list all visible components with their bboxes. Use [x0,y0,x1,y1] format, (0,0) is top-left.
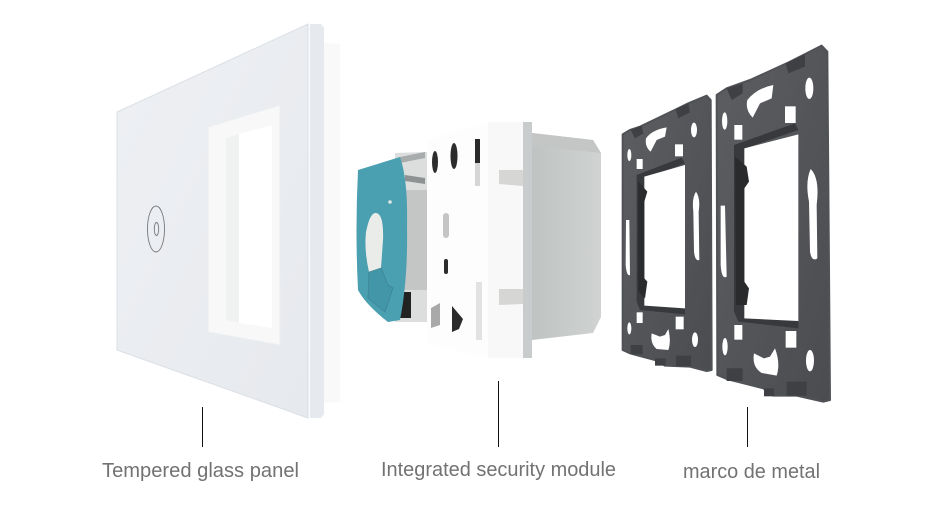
pointer line: glass [202,407,204,447]
grey rear box [532,133,601,340]
left metal frame [623,96,712,371]
label: marco de metal: marco de metal [683,461,820,483]
blue circuit board [356,157,407,322]
icon: touch button [148,206,164,252]
label: tempered glass panel: Tempered glass panel [102,460,299,482]
glass side edge [308,24,324,418]
mechanism behind the blue board [395,152,427,322]
socket holes [432,151,438,173]
window frame [208,105,280,345]
right metal frame [717,46,830,402]
clips [499,170,523,186]
panel: security module [356,122,601,358]
glass front [117,24,308,418]
side strip [523,122,532,358]
white front [427,122,523,358]
panel: metal frames [623,46,830,402]
label: integrated security module: Integrated security module [381,459,616,481]
panel: tempered glass [117,24,340,418]
pointer line: frame [746,407,748,447]
pointer line: module [498,381,500,447]
back plate [324,43,340,403]
